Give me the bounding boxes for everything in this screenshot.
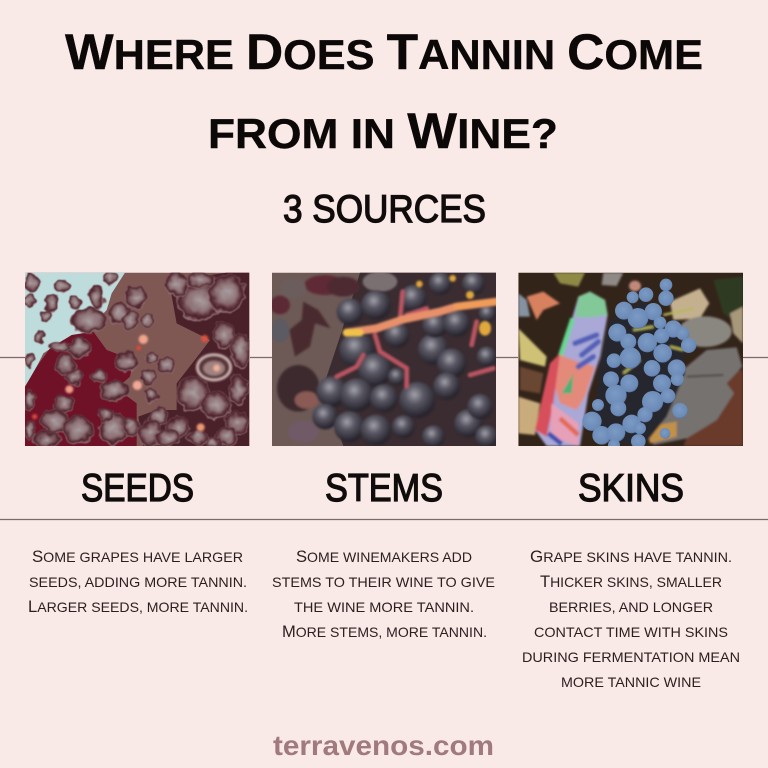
text: stems description: MORE STEMS, MORE TANNIN. bbox=[282, 623, 487, 641]
photo: stems bbox=[270, 272, 498, 448]
text: skins description: DURING FERMENTATION MEAN bbox=[522, 649, 740, 665]
text: skins description bbox=[522, 548, 740, 690]
text: seeds description: LARGER SEEDS, MORE TANNIN. bbox=[28, 598, 248, 616]
text: stems description bbox=[272, 548, 495, 641]
text: skins description: THICKER SKINS, SMALLER bbox=[540, 573, 722, 591]
text: skins description: MORE TANNIC WINE bbox=[561, 674, 701, 690]
text: stems description: STEMS TO THEIR WINE TO GIVE bbox=[272, 574, 495, 590]
footer: website: terravenos.com bbox=[273, 730, 494, 761]
subtitle: 3 SOURCES bbox=[283, 188, 486, 231]
text: skins description: BERRIES, AND LONGER bbox=[549, 599, 713, 615]
photo: seeds bbox=[24, 272, 251, 449]
text: skins description: CONTACT TIME WITH SKINS bbox=[534, 624, 728, 640]
label: skins: SKINS bbox=[578, 467, 684, 510]
text: seeds description: SEEDS, ADDING MORE TANNIN. bbox=[29, 574, 247, 590]
title: WHERE DOES TANNIN COME bbox=[65, 24, 703, 80]
title bbox=[65, 24, 703, 159]
text: skins description: GRAPE SKINS HAVE TANNIN. bbox=[530, 548, 732, 566]
photo: skins bbox=[518, 273, 743, 451]
text: seeds description: SOME GRAPES HAVE LARGER bbox=[32, 548, 243, 566]
title: FROM IN WINE? bbox=[208, 103, 558, 159]
label: stems: STEMS bbox=[325, 467, 443, 510]
text: stems description: SOME WINEMAKERS ADD bbox=[296, 548, 472, 566]
text: seeds description bbox=[28, 548, 248, 616]
text: stems description: THE WINE MORE TANNIN. bbox=[294, 599, 474, 615]
label: seeds: SEEDS bbox=[81, 467, 194, 510]
